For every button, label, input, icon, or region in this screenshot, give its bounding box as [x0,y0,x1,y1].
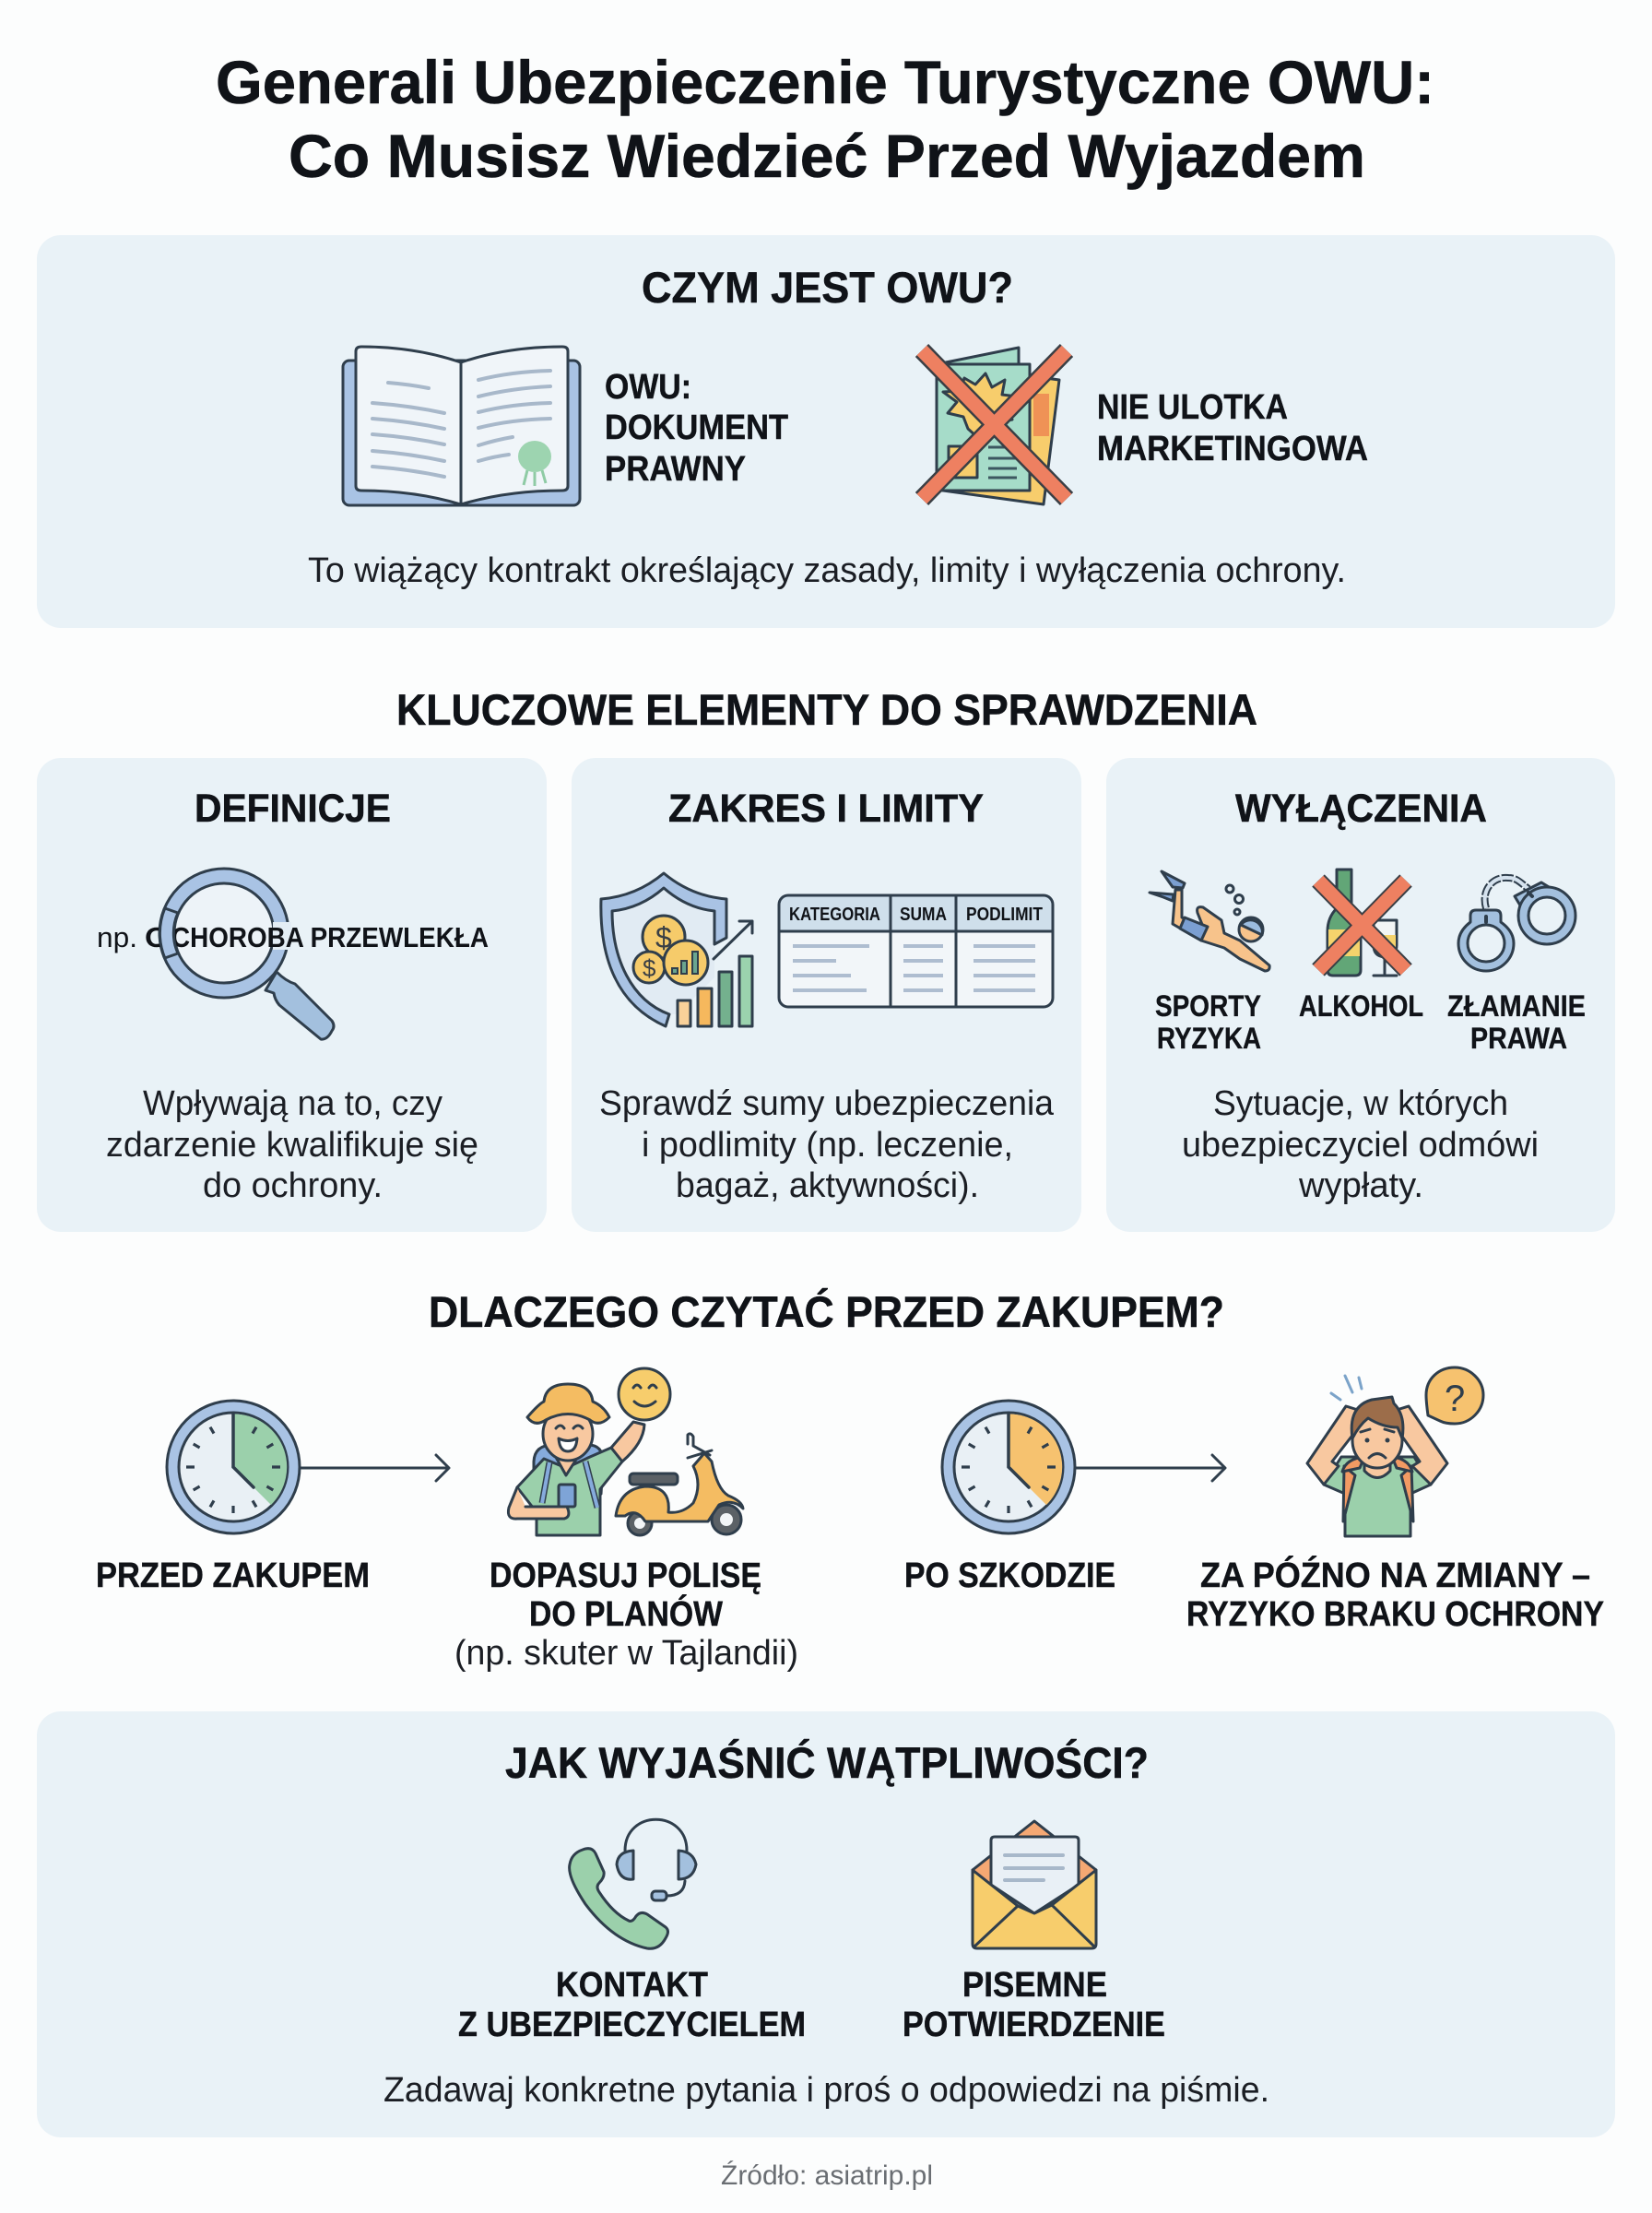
text: labels wyłączenia: RYZYKA [1157,1022,1261,1055]
text: pisemne potwierdzenie [903,1966,1165,2044]
text: kontakt z ubezpieczycielem: KONTAKT [556,1966,708,2005]
text: wyłączenia opis: Sytuacje, w których [1213,1084,1508,1123]
chart: limits table [779,895,1053,1007]
text: np. choroba przewlekła: np. [97,921,137,953]
text: pisemne potwierdzenie: PISEMNE [962,1966,1107,2005]
title: Co Musisz Wiedzieć Przed Wyjazdem [289,122,1365,190]
heading: jak wyjaśnić: JAK WYJAŚNIĆ WĄTPLIWOŚCI? [505,1738,1149,1787]
text: kontakt z ubezpieczycielem: Z UBEZPIECZYCIELEM [458,2006,806,2044]
title [216,48,1434,190]
text: labels wyłączenia: ZŁAMANIE [1447,989,1586,1023]
icon: shield coins and bars [601,873,752,1026]
icon: happy traveler with scooter [508,1368,743,1535]
icon: magnifying glass [159,869,334,1039]
panel: definicje [37,758,547,1232]
text: wiążący kontrakt: To wiążący kontrakt określający zasady, limity i wyłączenia ochrony. [308,551,1346,590]
text: kontakt z ubezpieczycielem [458,1966,806,2044]
icon: shield coins and bars: $ [643,954,656,982]
text: za późno na zmiany [1186,1555,1604,1634]
icon: crossed-out brochure [922,348,1067,504]
text: zakres opis [599,1084,1055,1205]
icon: diver [1150,871,1269,971]
icon: worried traveler [1307,1367,1483,1536]
text: labels wyłączenia: SPORTY [1155,989,1261,1023]
text: OWU dokument prawny: PRAWNY [605,450,746,489]
icon: clock green [167,1401,300,1533]
icon: crossed-out alcohol [1318,870,1406,976]
panel: jak wyjaśnić wątpliwości [37,1711,1615,2137]
text: zakres opis: i podlimity (np. leczenie, [642,1126,1013,1165]
arrow: clock to worried person [1076,1455,1225,1481]
text: definicje opis [106,1084,478,1205]
icon: clock orange [942,1401,1075,1533]
icon: envelope with letter [973,1821,1096,1948]
heading: zakres i limity: ZAKRES I LIMITY [668,787,984,831]
text: zakres opis: Sprawdź sumy ubezpieczenia [599,1084,1055,1123]
icon: handcuffs [1458,878,1575,971]
text: definicje opis: Wpływają na to, czy [143,1084,442,1123]
text: labels wyłączenia [1155,989,1586,1055]
text: zadawaj konkretne pytania: Zadawaj konkretne pytania i proś o odpowiedzi na piśmie. [384,2071,1269,2110]
text: OWU dokument prawny: OWU: [605,368,691,407]
text: definicje opis: zdarzenie kwalifikuje się [106,1126,478,1165]
heading: definicje: DEFINICJE [195,787,391,831]
text: nie ulotka marketingowa: NIE ULOTKA [1097,388,1288,427]
text: labels wyłączenia: ALKOHOL [1299,989,1423,1023]
heading: dlaczego czytać: DLACZEGO CZYTAĆ PRZED ZAKUPEM? [429,1287,1224,1336]
heading: czym jest OWU: CZYM JEST OWU? [642,263,1013,312]
chart: limits table: PODLIMIT [966,905,1043,925]
text: definicje opis: do ochrony. [203,1166,383,1205]
text: labels wyłączenia: PRAWA [1470,1022,1567,1055]
text: za późno na zmiany: RYZYKO BRAKU OCHRONY [1186,1595,1604,1634]
text: dopasuj polisę: (np. skuter w Tajlandii) [454,1634,798,1673]
icon: phone with headset [570,1819,696,1948]
text: wyłączenia opis: wypłaty. [1298,1166,1423,1205]
text: po szkodzie: PO SZKODZIE [904,1556,1115,1595]
icon: open book with seal [343,347,580,505]
text: dopasuj polisę [454,1556,798,1673]
text: OWU dokument prawny: DOKUMENT [605,408,788,447]
text: np. choroba przewlekła: O [145,921,169,953]
text: OWU dokument prawny [605,368,788,489]
text: nie ulotka marketingowa [1097,388,1368,468]
text: dopasuj polisę: DO PLANÓW [529,1593,723,1634]
icon: magnifier rim over text [159,908,178,958]
text: pisemne potwierdzenie: POTWIERDZENIE [903,2006,1165,2044]
chart: limits table: SUMA [900,905,947,925]
panel: wyłączenia [1106,758,1615,1232]
text: wyłączenia opis [1182,1084,1539,1205]
text: wyłączenia opis: ubezpieczyciel odmówi [1182,1126,1539,1165]
text: nie ulotka marketingowa: MARKETINGOWA [1097,430,1368,468]
text: dopasuj polisę: DOPASUJ POLISĘ [490,1556,761,1595]
icon: shield coins and bars: $ [655,921,672,954]
arrow: clock to traveler [300,1455,449,1481]
heading: wyłączenia: WYŁĄCZENIA [1235,787,1487,831]
text: za późno na zmiany: ZA PÓŹNO NA ZMIANY – [1200,1555,1590,1595]
panel: zakres i limity [572,758,1081,1232]
heading: kluczowe elementy: KLUCZOWE ELEMENTY DO SPRAWDZENIA [396,685,1257,734]
title: Generali Ubezpieczenie Turystyczne OWU: [216,48,1434,116]
icon: worried traveler: ? [1445,1379,1465,1419]
source: Źródło: asiatrip.pl [721,2160,933,2191]
text: zakres opis: bagaż, aktywności). [676,1166,979,1205]
chart: limits table: KATEGORIA [789,905,880,925]
panel: czym jest OWU [37,235,1615,628]
text: np. choroba przewlekła: CHOROBA PRZEWLEKŁA [171,921,489,953]
text: przed zakupem: PRZED ZAKUPEM [96,1556,370,1595]
